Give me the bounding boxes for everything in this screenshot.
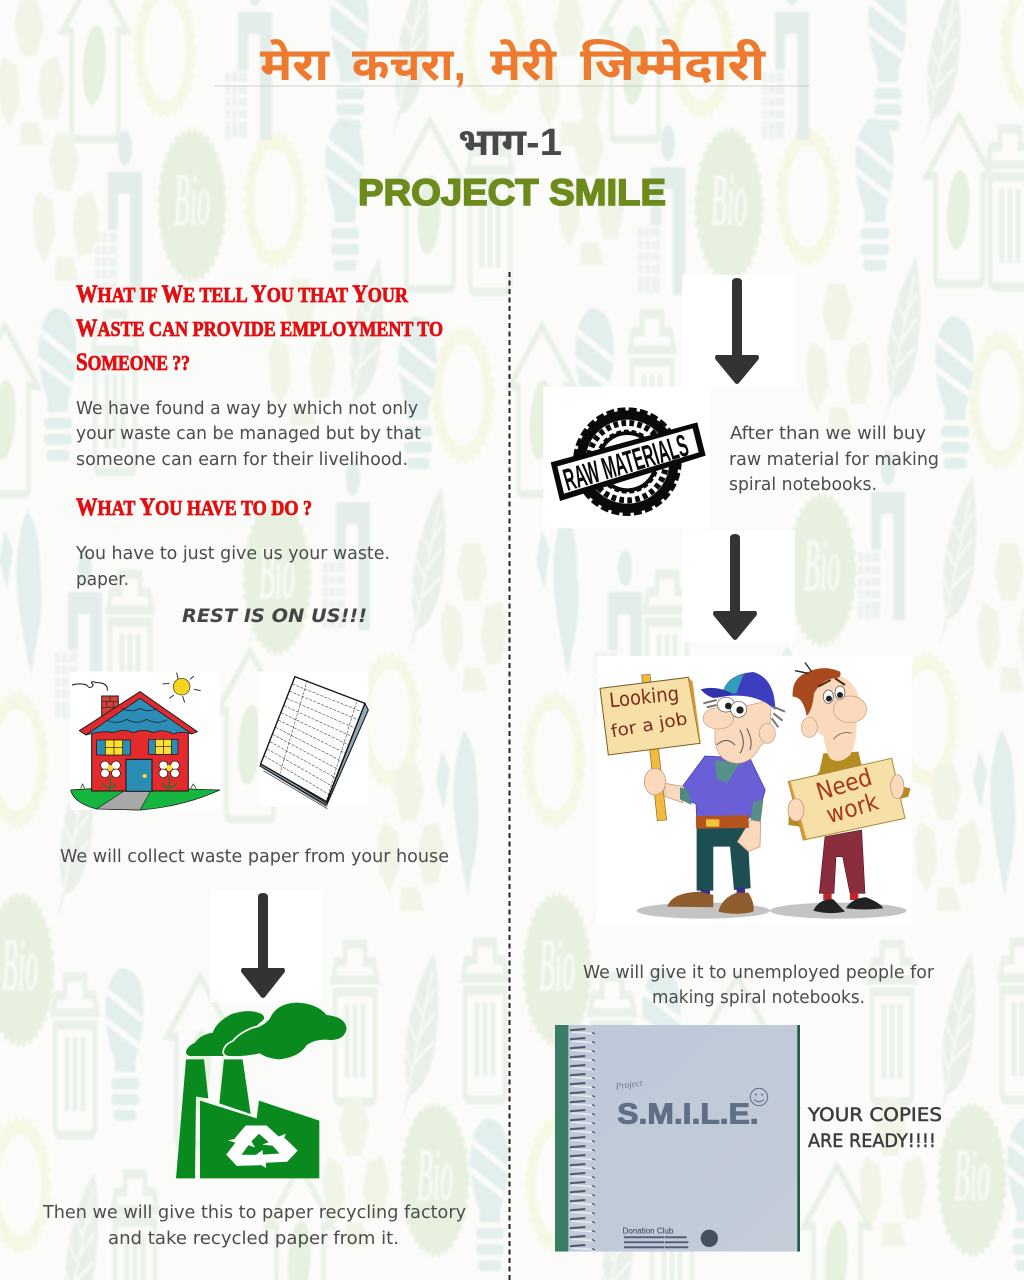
- text: your copies are ready: [807, 1104, 942, 1152]
- icon: stack of waste paper: [258, 672, 368, 809]
- panel: right column: [543, 275, 942, 1252]
- title: [215, 37, 810, 90]
- icon: green recycling factory: [176, 1003, 347, 1178]
- text: buy raw material: raw material for making: [729, 449, 939, 470]
- panel: left column: [42, 281, 466, 1249]
- man with need work sign: Need: [813, 763, 875, 806]
- background pattern: Bio: [174, 160, 210, 242]
- title: मेरा: [260, 37, 331, 90]
- question heading: SOMEONE ??: [76, 349, 190, 376]
- what to do text: [75, 543, 390, 590]
- text: buy raw material: After than we will buy: [730, 423, 926, 444]
- caption: recycling factory: [42, 1202, 466, 1249]
- man with looking for a job sign: Looking: [608, 681, 680, 712]
- caption: collect paper: We will collect waste paper from your house: [60, 846, 449, 867]
- photo: project smile notebook: Project: [614, 1079, 644, 1092]
- icon: house: [70, 672, 220, 810]
- background pattern: Bio: [804, 525, 840, 607]
- intro text: We have found a way by which not only: [76, 398, 418, 419]
- caption: unemployed people: making spiral notebooks.: [652, 987, 865, 1008]
- caption: recycling factory: Then we will give this to paper recycling factory: [42, 1202, 466, 1223]
- man with need work sign: [788, 663, 911, 913]
- illustration: unemployed men with signs: [597, 656, 912, 924]
- title: मेरी: [490, 37, 558, 90]
- caption: unemployed people: We will give it to unemployed people for: [583, 962, 935, 983]
- arrow: down to raw materials: [682, 275, 795, 387]
- text: buy raw material: spiral notebooks.: [729, 474, 877, 495]
- background pattern: Bio: [417, 1135, 453, 1217]
- photo: project smile notebook: S.M.I.L.E.: [617, 1098, 759, 1130]
- background pattern: Bio: [954, 1135, 990, 1217]
- icon: raw materials stamp: RAW MATERIALS: [559, 428, 692, 498]
- caption: recycling factory: and take recycled paper from it.: [108, 1228, 399, 1249]
- rest is on us callout: REST IS ON US!!!: [182, 605, 367, 627]
- text: buy raw material: [729, 423, 939, 495]
- title: जिम्मेदारी: [580, 37, 767, 90]
- background pattern: Bio: [2, 925, 38, 1007]
- subtitle: part 1: भाग-1: [458, 122, 562, 164]
- dashed column divider: [508, 272, 510, 1280]
- text: your copies are ready: ARE READY!!!!: [808, 1130, 936, 1152]
- what to do text: You have to just give us your waste.: [75, 543, 390, 564]
- arrow: down to workers: [682, 530, 795, 642]
- background pattern: Bio: [711, 160, 747, 242]
- what to do heading: WHAT YOU HAVE TO DO ?: [76, 494, 312, 521]
- man with need work sign: work: [823, 788, 882, 829]
- icon: raw materials stamp: [543, 387, 710, 528]
- intro text: your waste can be managed but by that: [76, 423, 421, 444]
- intro text: [76, 398, 421, 470]
- question heading: [76, 281, 443, 376]
- question heading: WASTE CAN PROVIDE EMPLOYMENT TO: [76, 315, 443, 342]
- background pattern: Bio: [539, 925, 575, 1007]
- caption: unemployed people: [583, 962, 935, 1008]
- question heading: WHAT IF WE TELL YOU THAT YOUR: [76, 281, 409, 308]
- man with looking for a job sign: [600, 672, 785, 914]
- what to do text: paper.: [76, 569, 129, 590]
- intro text: someone can earn for their livelihood.: [76, 449, 408, 470]
- text: your copies are ready: YOUR COPIES: [807, 1104, 942, 1126]
- photo: project smile notebook: [555, 1025, 800, 1252]
- background pattern: Bio: [259, 533, 295, 615]
- man with looking for a job sign: for a job: [609, 709, 689, 742]
- title: कचरा,: [352, 38, 466, 90]
- heading: project smile: PROJECT SMILE: [358, 172, 666, 213]
- arrow: down left: [210, 890, 322, 1002]
- photo: project smile notebook: Donation Club: [623, 1226, 674, 1235]
